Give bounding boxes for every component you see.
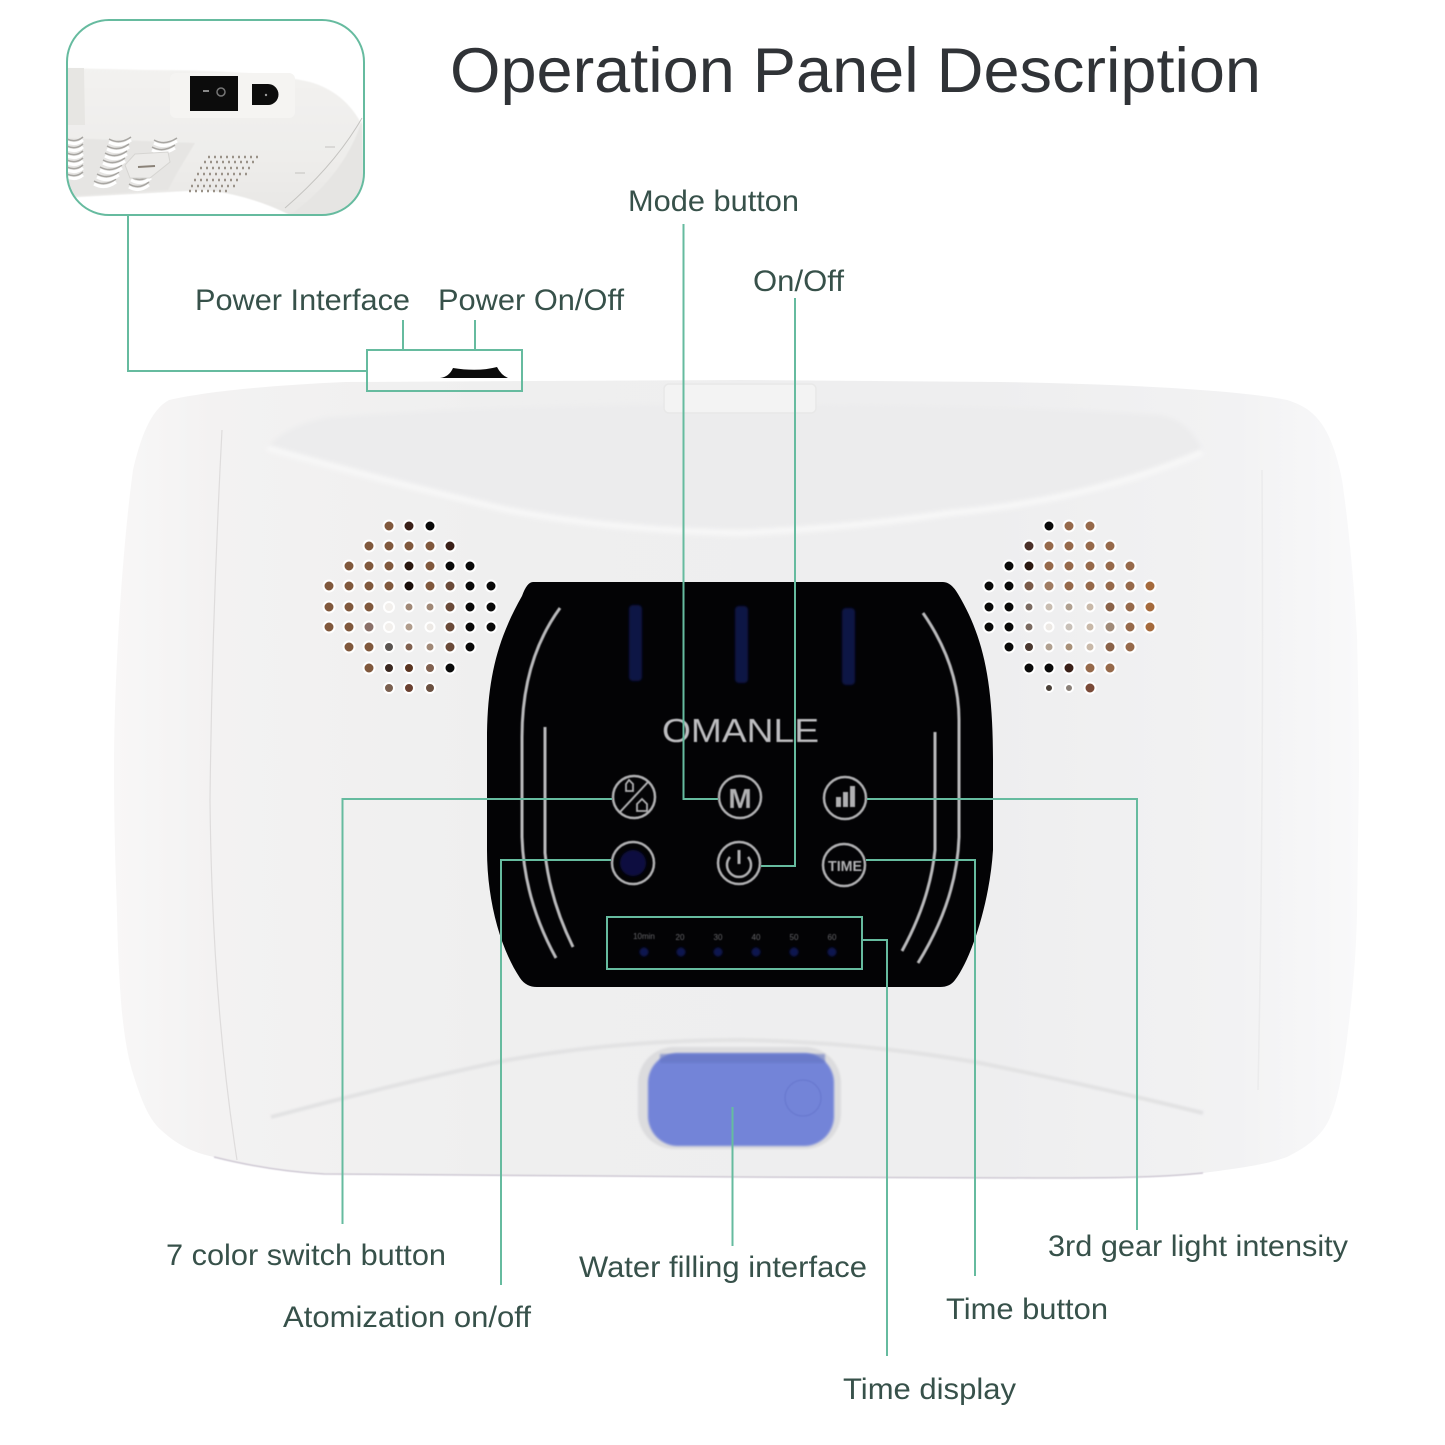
inset photo: rear ports: [68, 68, 363, 214]
band highlight: [267, 448, 1203, 533]
icon: 7 color switch button: [613, 776, 655, 818]
label: on/off: On/Off: [753, 265, 845, 298]
power jack: [252, 84, 278, 105]
top tab: [664, 384, 816, 413]
icon: atomization button: [612, 842, 654, 884]
time display scale: [633, 932, 837, 956]
icon: time button: [823, 844, 865, 886]
left speaker grille: [324, 520, 496, 693]
crescent vents: [67, 137, 177, 187]
panel curved lines: [522, 608, 959, 963]
label: 3rd gear light intensity: 3rd gear light intensity: [1048, 1230, 1348, 1263]
blue indicator bars: [629, 605, 855, 685]
time display scale: 50: [790, 933, 799, 942]
water filling window: [638, 1047, 841, 1149]
rocker switch: [190, 76, 238, 111]
time display scale: 40: [752, 933, 761, 942]
inset border: [67, 20, 364, 215]
leader: light intensity: [867, 799, 1137, 1230]
icon: light intensity button: [824, 777, 866, 819]
callout: power connectors: [128, 215, 522, 391]
time display scale: 10min: [633, 932, 655, 941]
bottom edge shade: [214, 1157, 1203, 1178]
icon: mode button: [719, 776, 761, 818]
brand name: OMANLE: [662, 712, 819, 749]
power switch on device top: [440, 367, 508, 378]
leader: on/off: [761, 298, 795, 866]
left seam: [210, 430, 237, 1160]
time display scale: 60: [828, 933, 837, 942]
top band: [267, 404, 1203, 533]
icon: time button: TIME: [828, 858, 862, 875]
label: atomization on/off: Atomization on/off: [283, 1301, 532, 1334]
label: mode button: Mode button: [628, 185, 799, 218]
callout: time display: [607, 917, 887, 1356]
title: Operation Panel Description: [450, 36, 1261, 106]
inset clip: [125, 152, 170, 178]
label: time button: Time button: [946, 1293, 1108, 1326]
time display scale: 20: [676, 933, 685, 942]
label: water filling interface: Water filling interface: [579, 1251, 867, 1284]
label: time display: Time display: [843, 1373, 1016, 1406]
vent dots: [189, 157, 260, 191]
device body: [114, 380, 1359, 1178]
right speaker grille: [984, 520, 1156, 694]
time display scale: 30: [714, 933, 723, 942]
leader: water filling: [732, 1107, 734, 1246]
leader: mode button: [684, 224, 718, 799]
port plate: [252, 73, 295, 78]
bottom crease: [271, 1040, 1203, 1117]
right seam: [1258, 470, 1262, 1090]
seam ticks: [285, 118, 362, 208]
icon: power button: [718, 842, 760, 884]
control panel: [487, 582, 993, 987]
leader: 7 color switch: [342, 799, 612, 1224]
label: power interface: Power Interface: [195, 284, 410, 317]
feet base: [68, 139, 194, 151]
label: power on/off: Power On/Off: [438, 284, 625, 317]
leader: time button: [866, 860, 975, 1276]
leader: atomization: [501, 860, 611, 1285]
icon: mode button: M: [728, 783, 752, 814]
label: 7 color switch button: 7 color switch button: [166, 1239, 446, 1272]
